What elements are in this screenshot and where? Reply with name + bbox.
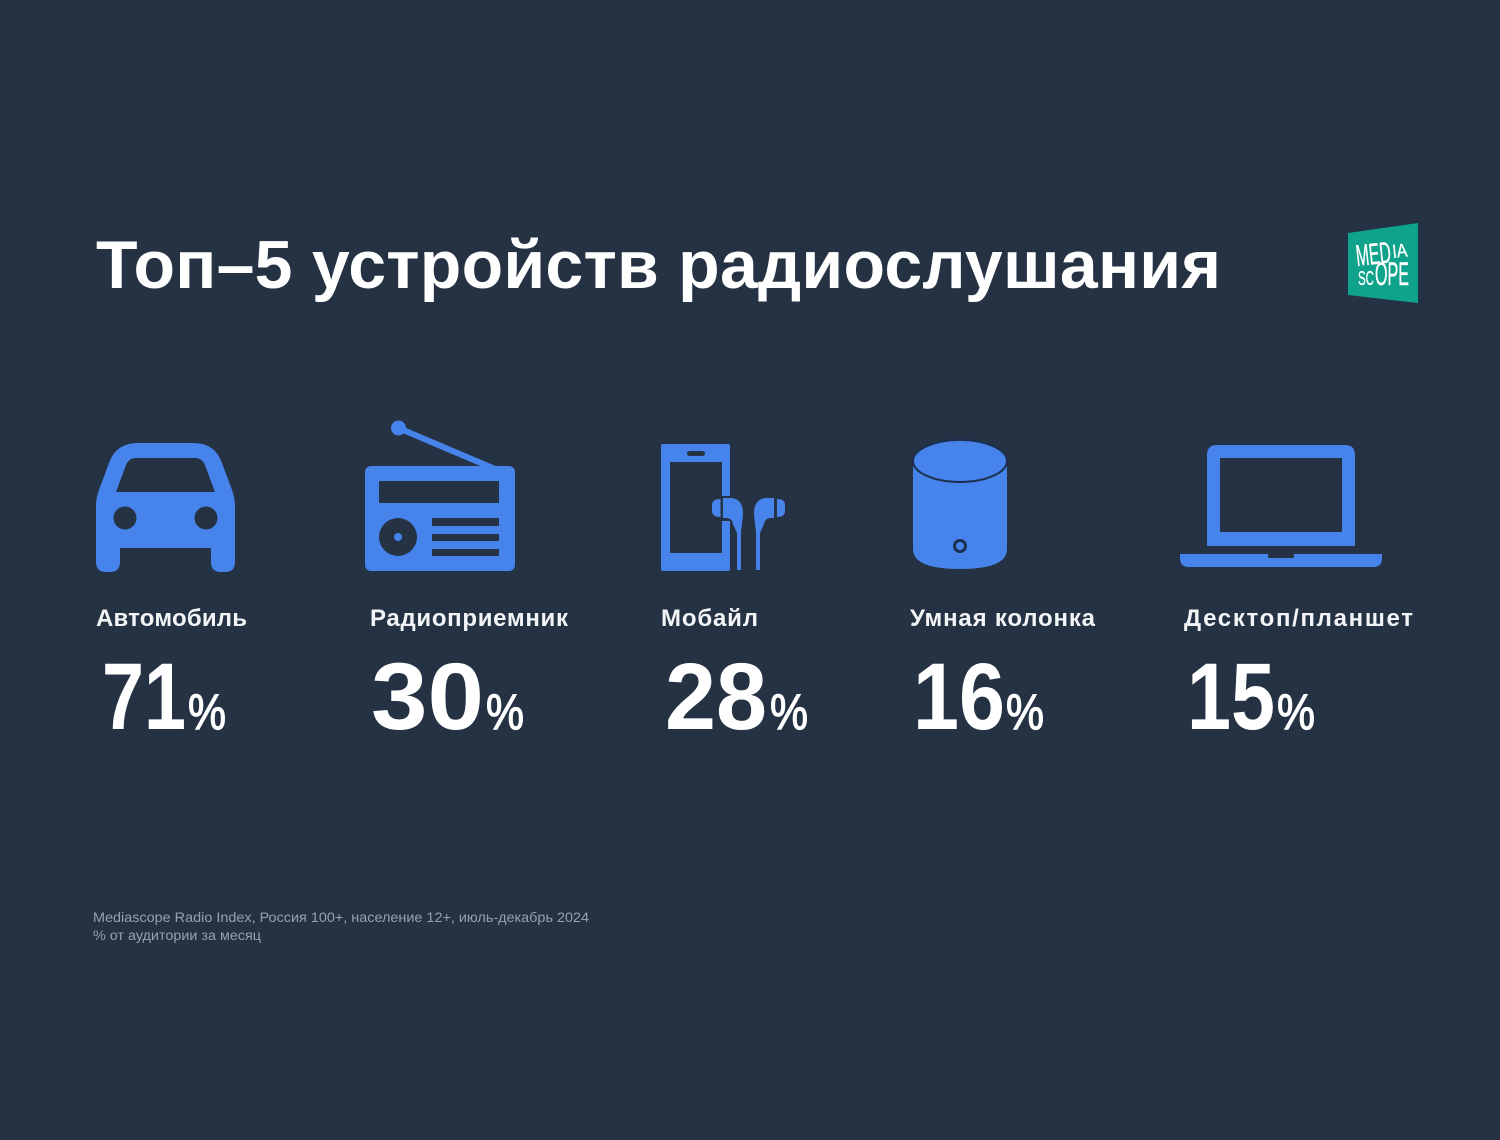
value: radio bbox=[371, 644, 524, 750]
footnote: % от аудитории за месяц bbox=[93, 927, 261, 943]
title: Топ–5 устройств радиослушания bbox=[96, 227, 1221, 303]
value: desktop/tablet: % bbox=[1277, 684, 1315, 740]
value: smart speaker: % bbox=[1006, 684, 1044, 740]
value: mobile: 28 bbox=[665, 644, 767, 750]
value: car: % bbox=[188, 684, 226, 740]
icon: car bbox=[96, 443, 235, 572]
value: smart speaker: 16 bbox=[913, 644, 1005, 750]
label: desktop/tablet: Десктоп/планшет bbox=[1184, 605, 1413, 632]
icon: laptop bbox=[1180, 445, 1382, 567]
logo: Mediascope: IA bbox=[1391, 240, 1409, 263]
item: smart speaker bbox=[910, 440, 1096, 750]
icon: phone with earphones bbox=[661, 444, 785, 571]
label: smart speaker: Умная колонка bbox=[910, 605, 1096, 632]
item: mobile bbox=[661, 444, 808, 750]
label: car: Автомобиль bbox=[96, 605, 247, 632]
icon: radio bbox=[365, 420, 515, 571]
item: desktop/tablet bbox=[1180, 445, 1413, 750]
label: radio: Радиоприемник bbox=[370, 605, 569, 632]
item: car bbox=[96, 443, 247, 750]
logo: Mediascope: MED bbox=[1354, 236, 1393, 273]
label: mobile: Мобайл bbox=[661, 605, 758, 632]
icon: smart speaker bbox=[913, 440, 1007, 569]
item: radio bbox=[365, 420, 569, 750]
value: radio: % bbox=[486, 684, 524, 740]
logo: Mediascope: SC bbox=[1358, 268, 1374, 290]
footnote bbox=[93, 909, 589, 943]
footnote: Mediascope Radio Index, Россия 100+, население 12+, июль-декабрь 2024 bbox=[93, 909, 589, 925]
value: mobile: % bbox=[770, 684, 808, 740]
value: radio: 30 bbox=[371, 644, 484, 750]
value: car: 71 bbox=[102, 644, 186, 750]
logo: Mediascope bbox=[1348, 223, 1418, 303]
logo: Mediascope: OPE bbox=[1375, 256, 1409, 292]
value: desktop/tablet: 15 bbox=[1187, 644, 1275, 750]
